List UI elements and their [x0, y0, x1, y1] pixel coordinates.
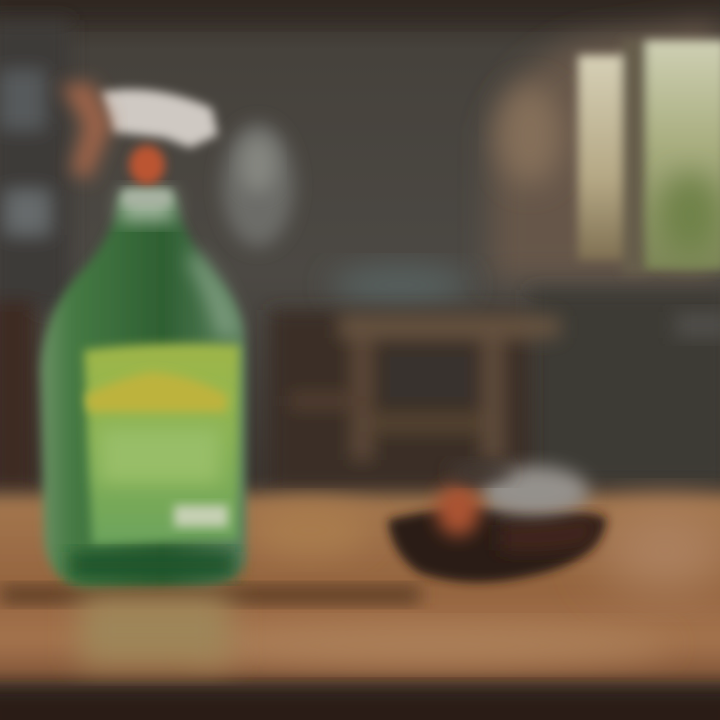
round wall object — [222, 123, 294, 247]
bottle reflection — [80, 595, 230, 665]
shoulder glare — [188, 250, 240, 338]
bottle neck highlight — [118, 190, 176, 222]
bowl — [388, 507, 606, 582]
label pale text area — [100, 428, 220, 483]
bottle label — [84, 343, 240, 545]
label white badge — [174, 505, 228, 527]
left wall shadow and shelves — [0, 20, 70, 490]
orange nozzle collar — [129, 145, 165, 185]
bottle body — [40, 195, 246, 587]
objects on background table — [330, 265, 470, 305]
dark top shadow — [448, 462, 512, 482]
window mullion — [622, 40, 646, 275]
label yellow banner — [85, 372, 228, 412]
lower wall panel right — [530, 290, 720, 485]
spray bottle — [40, 82, 246, 665]
window — [578, 40, 720, 275]
neck white cap — [122, 190, 172, 206]
table light patches — [250, 504, 370, 556]
grey object — [481, 466, 589, 518]
background table — [270, 310, 560, 490]
table front edge — [0, 688, 720, 720]
foreground table top — [0, 494, 720, 684]
sprayer head — [100, 89, 218, 148]
bowl rim — [500, 515, 600, 552]
bottle base — [70, 552, 235, 578]
window pane: left — [578, 55, 622, 260]
window pane: right — [646, 40, 720, 270]
shadow under objects — [0, 586, 420, 604]
trigger — [60, 82, 112, 180]
window alcove — [490, 20, 720, 280]
ceiling shadow — [0, 0, 720, 20]
background wall — [0, 0, 720, 500]
orange object — [436, 484, 480, 536]
dark bowl with items — [388, 462, 606, 582]
